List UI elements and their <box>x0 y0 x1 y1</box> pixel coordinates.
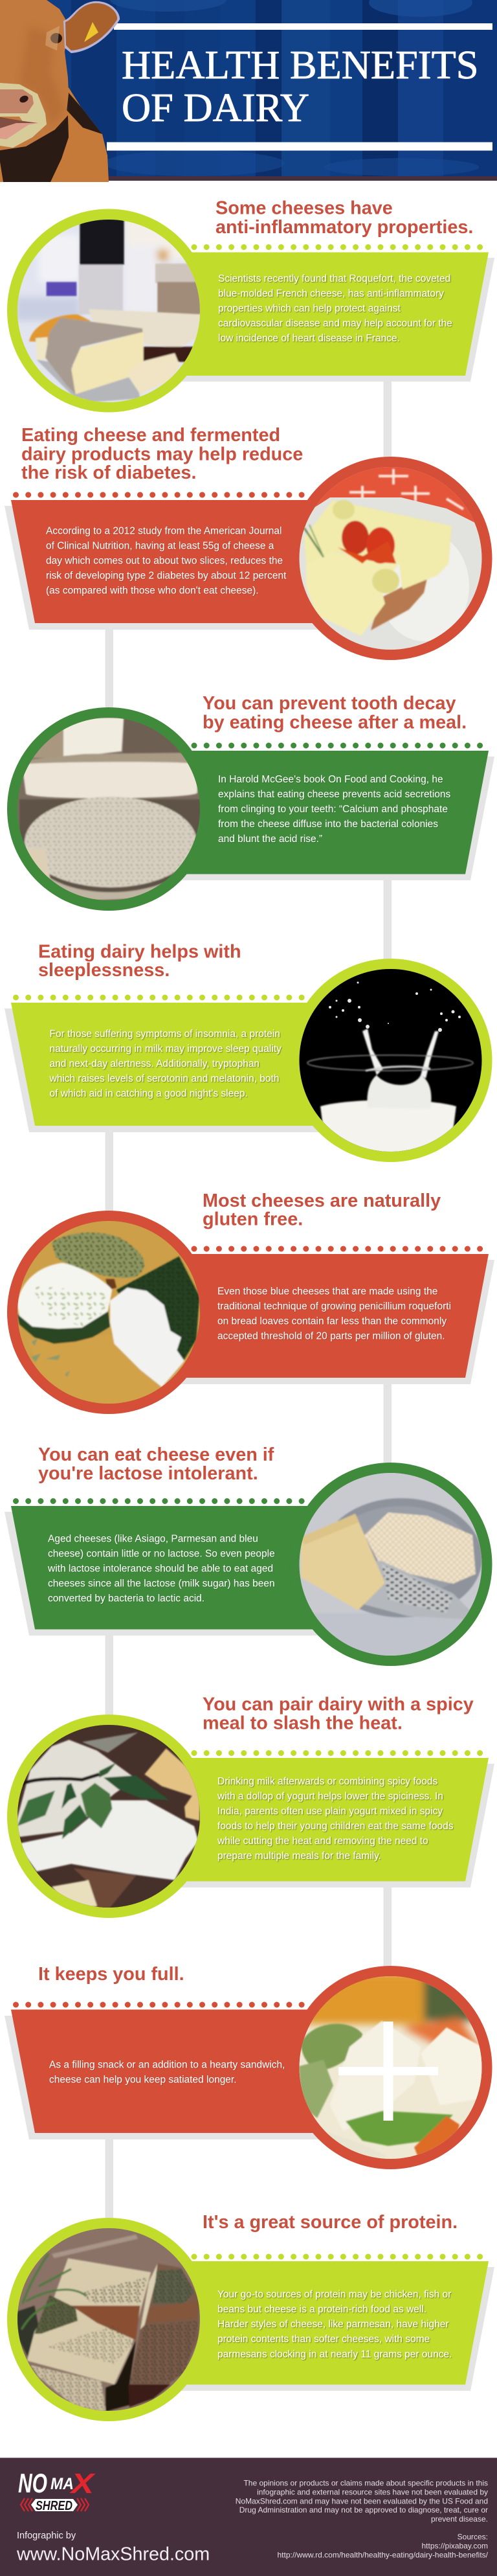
body text: day which comes out to about two slices, reduces the <box>46 556 283 566</box>
body text: explains that eating cheese prevents acid secretions <box>218 789 451 800</box>
heading: Most cheeses are naturally <box>203 1191 441 1211</box>
body text: traditional technique of growing penicillium roqueforti <box>217 1301 451 1312</box>
body text <box>217 1286 451 1342</box>
logo: No Max Shred: SHRED <box>36 2499 72 2513</box>
body text: Aged cheeses (like Asiago, Parmesan and bleu <box>48 1534 258 1544</box>
heading <box>203 1694 474 1733</box>
body text <box>218 774 451 845</box>
title: HEALTH BENEFITS <box>122 42 479 87</box>
body text: beans but cheese is a protein-rich food as well. <box>217 2304 426 2315</box>
panel: diabetes <box>5 425 492 660</box>
body text: on bread loaves contain far less than the commonly <box>217 1316 447 1327</box>
disclaimer and sources: https://pixabay.com <box>422 2542 488 2551</box>
heading: You can eat cheese even if <box>38 1444 274 1465</box>
heading <box>203 1191 441 1229</box>
body text: while cutting the heat and removing the need to <box>217 1836 428 1847</box>
logo: No Max Shred <box>18 2468 96 2513</box>
body text: and next-day alertness. Additionally, tryptophan <box>49 1058 260 1069</box>
body text: which raises levels of serotonin and melatonin, both <box>49 1073 279 1084</box>
disclaimer and sources: prevent disease. <box>431 2514 488 2524</box>
disclaimer and sources: NoMaxShred.com and may have not been evaluated by the US Food and <box>236 2496 488 2505</box>
body text: with lactose intolerance should be able to eat aged <box>47 1564 273 1574</box>
credit: Infographic by <box>17 2531 76 2541</box>
photo: parmesan and grater <box>299 1473 481 1656</box>
disclaimer and sources: http://www.rd.com/health/healthy-eating/dairy-health-benefits/ <box>277 2551 489 2560</box>
logo: No Max Shred: MA <box>50 2475 74 2493</box>
body text: of which aid in catching a good night's sleep. <box>49 1088 248 1099</box>
body text: foods to help their young children eat the same foods <box>217 1821 454 1832</box>
heading: dairy products may help reduce <box>21 444 303 465</box>
heading: sleeplessness. <box>38 960 170 981</box>
panel: protein <box>6 2212 494 2422</box>
heading: You can pair dairy with a spicy <box>203 1694 474 1715</box>
body text: blue-molded French cheese, has anti-inflammatory <box>218 288 444 299</box>
logo: No Max Shred: X <box>69 2468 96 2500</box>
body text: from the cheese diffuse into the bacterial colonies <box>218 819 438 830</box>
photo: cheese salad <box>299 1976 481 2159</box>
connector lines <box>105 379 392 2220</box>
body text <box>46 526 287 596</box>
heading: Some cheeses have <box>215 198 393 219</box>
body text <box>217 1776 454 1862</box>
heading <box>21 425 303 483</box>
title <box>122 42 479 130</box>
heading <box>203 693 467 733</box>
heading: anti-inflammatory properties. <box>215 217 473 238</box>
body text: low incidence of heart disease in France. <box>218 333 400 344</box>
panel: spicy meal <box>6 1694 494 1919</box>
body text <box>47 1534 275 1604</box>
photo: milk splash in glass <box>299 969 481 1152</box>
body text: In Harold McGee's book On Food and Cooking, he <box>218 774 443 785</box>
illustration: cow <box>0 0 120 182</box>
heading: by eating cheese after a meal. <box>203 712 467 733</box>
footer <box>0 2457 497 2576</box>
photo: swiss cheese with tomato <box>298 463 485 657</box>
body text: According to a 2012 study from the American Journal <box>46 526 282 536</box>
body text: protein contents than softer cheeses, with some <box>217 2334 430 2345</box>
body text: parmesans clocking in at nearly 11 grams per ounce. <box>217 2349 452 2360</box>
body text: cheese can help you keep satiated longer. <box>49 2074 237 2086</box>
panel: gluten free <box>6 1191 494 1415</box>
photo: soft cheese with leaves <box>17 1725 200 1908</box>
top white rule <box>114 23 492 30</box>
body text: Harder styles of cheese, like parmesan, have higher <box>217 2319 449 2330</box>
heading: gluten free. <box>203 1209 303 1229</box>
body text: Even those blue cheeses that are made using the <box>217 1286 437 1297</box>
body text: with a dollop of yogurt helps lower the spiciness. In <box>217 1791 443 1802</box>
body text: As a filling snack or an addition to a hearty sandwich, <box>49 2060 285 2070</box>
panel: tooth decay <box>7 693 494 911</box>
panel: lactose intolerant <box>5 1444 492 1666</box>
white plus sign <box>338 2022 438 2121</box>
panel: anti-inflammatory cheeses <box>6 198 494 413</box>
body text: from clinging to your teeth: “Calcium and phosphate <box>218 804 448 815</box>
body text: cardiovascular disease and may help account for the <box>218 318 452 329</box>
heading: Eating cheese and fermented <box>21 425 280 446</box>
body text <box>218 273 452 344</box>
body text <box>49 2060 285 2086</box>
body text: cheeses since all the lactose (milk sugar) has been <box>48 1578 275 1590</box>
heading: It keeps you full. <box>38 1964 184 1985</box>
disclaimer and sources: Sources: <box>458 2533 488 2542</box>
body text: For those suffering symptoms of insomnia, a protein <box>49 1029 280 1040</box>
title: OF DAIRY <box>122 85 309 130</box>
body text: prepare multiple meals for the family. <box>217 1851 381 1862</box>
panel: sleeplessness <box>5 942 492 1162</box>
body text: (as compared with those who don't eat cheese). <box>46 586 259 596</box>
body text: properties which can help protect against <box>218 303 401 314</box>
heading: the risk of diabetes. <box>21 462 196 483</box>
credit <box>16 2531 210 2565</box>
body text <box>49 1029 282 1099</box>
body text: India, parents often use plain yogurt mixed in spicy <box>217 1806 443 1817</box>
heading: You can prevent tooth decay <box>203 693 456 714</box>
heading <box>215 198 473 238</box>
body text: and blunt the acid rise.” <box>218 834 322 845</box>
disclaimer and sources: The opinions or products or claims made about specific products in this <box>243 2478 488 2487</box>
heading: you're lactose intolerant. <box>38 1463 258 1484</box>
disclaimer and sources: infographic and external resource sites have not been evaluated by <box>257 2487 488 2496</box>
disclaimer and sources <box>236 2478 489 2560</box>
body text: converted by bacteria to lactic acid. <box>48 1593 204 1604</box>
heading: meal to slash the heat. <box>203 1713 403 1733</box>
panel: keeps you full <box>5 1964 492 2169</box>
body text: Drinking milk afterwards or combining spicy foods <box>217 1776 438 1787</box>
header banner <box>0 0 497 182</box>
heading <box>38 942 241 981</box>
heading: Eating dairy helps with <box>38 942 241 963</box>
photo: herb-crusted fresh cheese <box>17 1221 200 1404</box>
body text: risk of developing type 2 diabetes by about 12 percent <box>46 570 287 582</box>
body text: of Clinical Nutrition, having at least 55g of cheese a <box>46 540 274 552</box>
photo: herb-crusted cheese blocks <box>17 2228 200 2411</box>
body text <box>217 2289 452 2360</box>
heading: It's a great source of protein. <box>203 2212 458 2233</box>
bottom white rule <box>107 142 492 150</box>
body text: accepted threshold of 20 parts per million of gluten. <box>217 1330 445 1342</box>
logo: No Max Shred: NO <box>18 2468 47 2498</box>
body text: Your go-to sources of protein may be chicken, fish or <box>217 2289 451 2300</box>
body text: cheese) contain little or no lactose. So even people <box>48 1548 275 1560</box>
photo: stacked cheese wheels <box>17 718 200 900</box>
photo: cheese wedge and wine bottle <box>17 220 200 402</box>
heading <box>38 1444 274 1484</box>
disclaimer and sources: Drug Administration and may not be approved to diagnose, treat, cure or <box>239 2505 488 2514</box>
body text: naturally occurring in milk may improve sleep quality <box>49 1043 282 1054</box>
credit: www.NoMaxShred.com <box>16 2544 210 2565</box>
body text: Scientists recently found that Roquefort, the coveted <box>218 273 450 284</box>
